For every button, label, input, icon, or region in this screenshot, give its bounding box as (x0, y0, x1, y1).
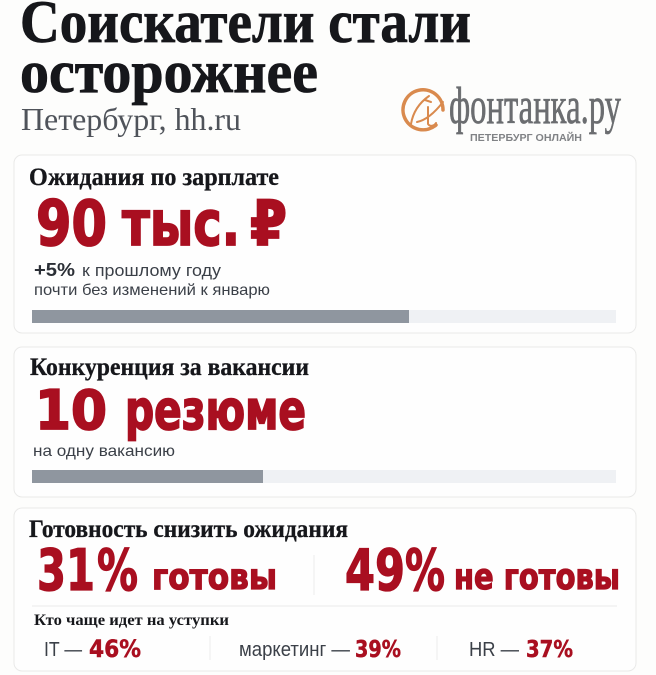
logo: fontanka.ru (403, 78, 621, 144)
stat: not ready: 49 (345, 538, 405, 604)
title (20, 0, 471, 105)
panel: salary expectations (14, 155, 636, 333)
stat: ready: готовы (152, 557, 277, 598)
title: осторожнее (20, 39, 318, 105)
change text: +5% (34, 260, 75, 280)
stat: not ready: % (405, 538, 445, 604)
stat: marketing (239, 637, 401, 663)
stat: marketing: 39% (355, 637, 401, 663)
heading: Конкуренция за вакансии (30, 354, 309, 381)
big number (36, 187, 287, 260)
progress bar (32, 470, 616, 483)
big number: 10 (35, 379, 107, 442)
stat: HR (469, 637, 573, 663)
big number: тыс. (122, 187, 240, 260)
subheading: Кто чаще идет на уступки (34, 612, 229, 629)
stat: ready (37, 538, 277, 604)
caption: на одну вакансию (33, 443, 175, 460)
stat: marketing: маркетинг — (239, 639, 350, 661)
progress bar (32, 310, 616, 323)
stat: ready: 31 (37, 538, 95, 604)
change text: почти без изменений к январю (34, 282, 270, 299)
heading: Готовность снизить ожидания (29, 516, 348, 543)
subtitle: Петербург, hh.ru (21, 101, 241, 137)
panel: competition (14, 347, 636, 497)
stat: not ready: не готовы (454, 557, 620, 598)
stat: ready: % (97, 538, 138, 604)
icon: logo emblem (403, 90, 443, 130)
logo tagline: ПЕТЕРБУРГ ОНЛАЙН (470, 131, 582, 144)
change text (34, 260, 270, 299)
panel: willingness to lower expectations (14, 508, 636, 671)
big number: резюме (125, 379, 306, 442)
stat: HR: 37% (526, 637, 573, 663)
stat: IT (44, 635, 141, 663)
big number (35, 379, 306, 442)
stat: IT: IT — (44, 639, 82, 661)
stat: HR: HR — (469, 639, 519, 661)
change text: к прошлому году (82, 261, 222, 280)
big number: ₽ (250, 187, 287, 260)
stat: IT: 46% (89, 635, 141, 663)
stat: not ready (345, 538, 620, 604)
big number: 90 (36, 187, 107, 260)
heading: Ожидания по зарплате (29, 164, 279, 191)
